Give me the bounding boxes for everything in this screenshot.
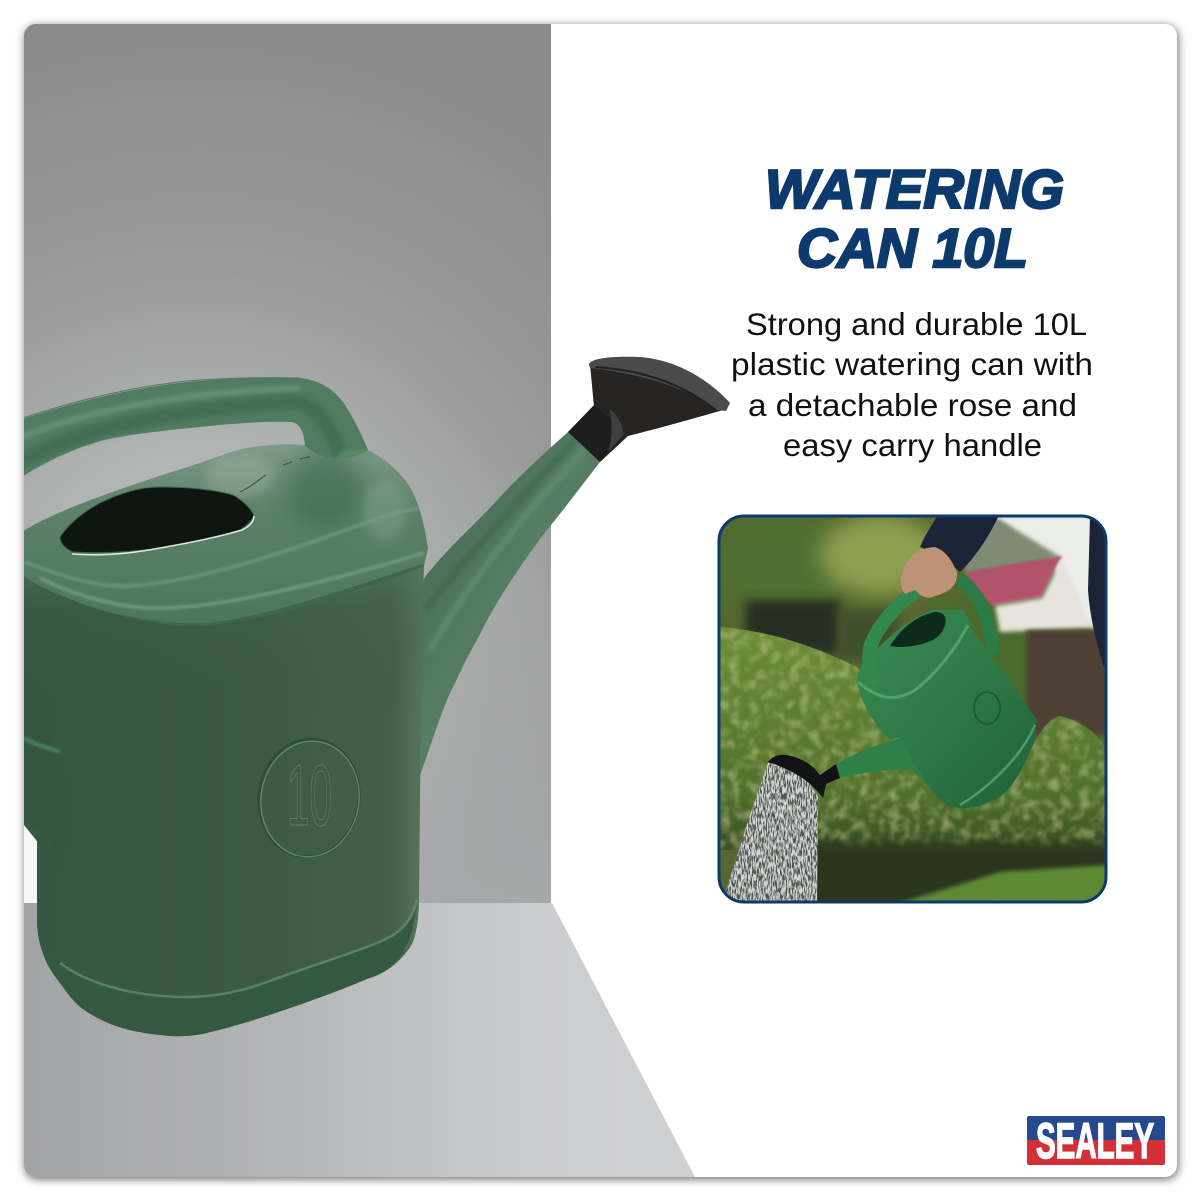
can opening — [890, 612, 946, 647]
product: green watering can — [20, 357, 730, 1036]
water spray — [722, 763, 818, 903]
side grip — [24, 823, 37, 842]
hedge base and lawn — [800, 842, 1120, 907]
hedge — [718, 627, 1108, 850]
watering rose — [768, 755, 840, 798]
person sleeve — [920, 515, 1108, 680]
title: CAN 10L — [797, 217, 1028, 279]
hand — [901, 547, 957, 598]
back handle — [958, 578, 993, 655]
title — [765, 158, 1064, 279]
title: WATERING — [765, 158, 1064, 220]
lid and shoulder — [20, 444, 428, 626]
detachable rose — [568, 357, 730, 462]
description text — [731, 306, 1093, 463]
spout — [420, 432, 600, 774]
background trees and house — [710, 515, 1110, 735]
photo: can being used in a garden — [710, 515, 1120, 907]
description text: a detachable rose and — [748, 387, 1077, 423]
spout — [836, 738, 946, 805]
can body — [20, 563, 424, 1036]
capacity mark — [974, 692, 1000, 724]
description text: easy carry handle — [783, 427, 1042, 463]
description text: plastic watering can with — [731, 346, 1093, 382]
panel: studio backdrop — [24, 24, 695, 1177]
filling hole — [60, 457, 310, 555]
base ridge — [37, 900, 418, 1036]
description text: Strong and durable 10L — [746, 306, 1087, 342]
front handle — [862, 590, 921, 664]
can body — [857, 610, 1037, 808]
handle — [20, 378, 372, 478]
embossed capacity badge — [258, 738, 361, 858]
embossed capacity badge: 10 — [287, 748, 332, 844]
